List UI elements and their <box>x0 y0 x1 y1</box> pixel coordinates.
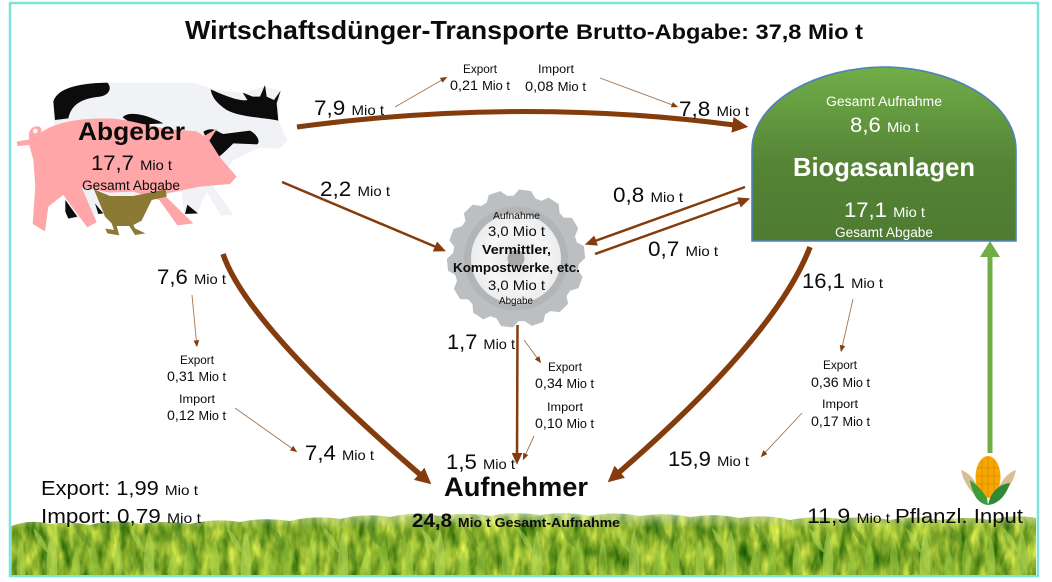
Abgeber label <box>78 118 185 193</box>
icon: corn <box>961 456 1016 505</box>
export and import labels: left route: Export <box>180 355 215 367</box>
export and import labels: right route: 0,17 Mio t <box>811 413 871 429</box>
icon: gear with Vermittler label: 3,0 Mio t <box>488 277 545 293</box>
export and import labels: right route <box>811 360 871 429</box>
icon: chicken <box>94 189 167 235</box>
flow value labels: 0,8 Mio t <box>613 184 683 207</box>
arrow: Vermittler to Aufnehmer <box>516 325 519 454</box>
Abgeber label: Abgeber <box>78 118 185 146</box>
icon: gear with Vermittler label: Abgabe <box>499 295 533 307</box>
export and import labels: right route: 0,36 Mio t <box>811 374 871 390</box>
flow value labels: 15,9 Mio t <box>668 448 749 471</box>
export and import labels: top route <box>450 64 587 94</box>
export and import labels: right route: Import <box>822 399 859 411</box>
export and import labels: top route: Import <box>538 64 575 76</box>
plant input label: 11,9 Mio t <box>807 505 890 528</box>
icon: gear with Vermittler label: Kompostwerke, etc. <box>453 260 580 275</box>
export and import totals: Export: 1,99 Mio t <box>41 478 198 500</box>
icon: cow <box>53 83 287 219</box>
export and import labels: left route: Import <box>179 394 216 406</box>
export and import labels: top route: Export <box>463 64 498 76</box>
flow value labels: 0,7 Mio t <box>648 238 718 261</box>
plant input label: Pflanzl. Input <box>895 506 1023 528</box>
flow value labels: 1,5 Mio t <box>446 451 515 474</box>
panel: Biogasanlagen dome: Biogasanlagen <box>793 152 975 182</box>
thin export and import arrows <box>192 78 853 454</box>
export and import labels: centre route: 0,10 Mio t <box>535 415 595 431</box>
Abgeber label: Gesamt Abgabe <box>82 178 180 193</box>
icon: gear with Vermittler label: 3,0 Mio t <box>488 223 545 239</box>
title: Wirtschaftsdünger-Transporte <box>185 15 569 45</box>
icon: gear with Vermittler label: Aufnahme <box>493 210 540 222</box>
export and import labels: centre route: Export <box>548 362 583 374</box>
panel: Biogasanlagen dome <box>752 67 1016 241</box>
arrow: Abgeber to Biogasanlagen <box>297 111 734 127</box>
icon: gear with Vermittler label <box>444 188 588 329</box>
Aufnehmer label: 24,8 Mio t Gesamt-Aufnahme <box>412 511 620 532</box>
icon: pig <box>17 118 237 231</box>
arrow: plant input to Biogasanlagen <box>980 241 1000 453</box>
Aufnehmer label: Aufnehmer <box>444 472 588 502</box>
export and import totals <box>41 478 201 528</box>
Aufnehmer label <box>412 472 620 532</box>
flow value labels: 16,1 Mio t <box>802 270 883 293</box>
export and import labels: left route: 0,31 Mio t <box>167 368 227 384</box>
arrow: Vermittler to Biogasanlagen <box>595 202 740 254</box>
export and import labels: left route <box>167 355 227 423</box>
export and import labels: left route: 0,12 Mio t <box>167 407 227 423</box>
icon: gear with Vermittler label: Vermittler, <box>482 242 551 257</box>
grass strip <box>12 510 1036 575</box>
export and import labels: right route: Export <box>823 360 858 372</box>
plant input label <box>807 505 1023 528</box>
arrow: Abgeber to Vermittler <box>282 182 436 247</box>
title <box>185 15 863 45</box>
flow value labels: 7,9 Mio t <box>314 97 384 120</box>
export and import labels: centre route <box>535 362 595 431</box>
flow value labels: 7,4 Mio t <box>305 442 374 465</box>
export and import labels: centre route: 0,34 Mio t <box>535 375 595 391</box>
arrow: Abgeber to Aufnehmer <box>223 254 420 475</box>
flow value labels <box>157 97 883 474</box>
panel: Biogasanlagen dome: Gesamt Aufnahme <box>826 94 942 109</box>
export and import labels: top route: 0,08 Mio t <box>525 78 587 94</box>
flow value labels: 2,2 Mio t <box>320 178 390 201</box>
flow value labels: 7,8 Mio t <box>679 98 749 121</box>
panel: Biogasanlagen dome: 17,1 Mio t <box>844 199 925 222</box>
arrow: Biogasanlagen to Vermittler <box>595 187 745 241</box>
flow value labels: 7,6 Mio t <box>157 266 226 289</box>
panel: Abgeber animals <box>17 83 287 235</box>
export and import labels: top route: 0,21 Mio t <box>450 77 511 93</box>
arrow: Biogasanlagen to Aufnehmer <box>619 247 810 473</box>
panel: Biogasanlagen dome: 8,6 Mio t <box>850 114 919 137</box>
flow value labels: 1,7 Mio t <box>447 331 515 354</box>
export and import labels: centre route: Import <box>547 402 584 414</box>
export and import totals: Import: 0,79 Mio t <box>41 506 201 528</box>
Abgeber label: 17,7 Mio t <box>91 152 172 175</box>
title: Brutto-Abgabe: 37,8 Mio t <box>576 20 863 44</box>
panel: Biogasanlagen dome: Gesamt Abgabe <box>835 225 933 240</box>
